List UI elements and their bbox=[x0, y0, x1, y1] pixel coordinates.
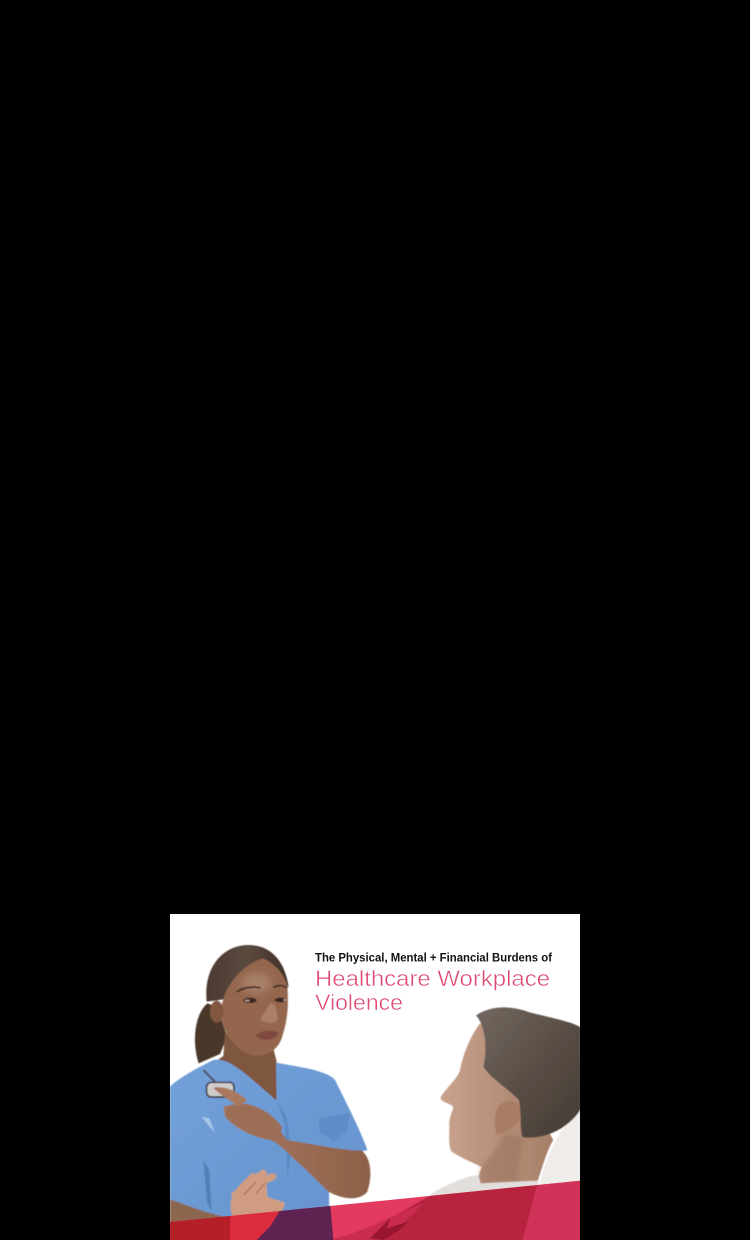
nurse ear bbox=[210, 1001, 223, 1023]
pointing finger bbox=[213, 1087, 247, 1107]
patient hair bbox=[476, 1007, 581, 1138]
pointing hand bbox=[226, 1102, 282, 1132]
title line 1: Healthcare Workplace bbox=[315, 966, 550, 991]
nurse figure bbox=[170, 945, 370, 1240]
nurse ponytail bbox=[195, 1003, 227, 1063]
nurse face bbox=[221, 958, 288, 1056]
band over gown bbox=[330, 1182, 538, 1240]
collar bbox=[430, 1175, 539, 1196]
red diagonal band bbox=[170, 1177, 581, 1240]
nurse eyes and brows bbox=[237, 986, 287, 1003]
face highlight bbox=[242, 973, 272, 993]
subtitle: The Physical, Mental + Financial Burdens of bbox=[315, 952, 552, 964]
nurse lips bbox=[255, 1031, 279, 1040]
raised hand bbox=[231, 1173, 285, 1227]
band on white bbox=[170, 1177, 581, 1240]
nurse hair bbox=[206, 945, 289, 1002]
patient ear bbox=[495, 1101, 522, 1134]
title bbox=[315, 966, 550, 1015]
gown dark fold bbox=[370, 1218, 408, 1240]
gown light fold bbox=[330, 1203, 423, 1240]
band over hand bbox=[230, 1211, 280, 1240]
band over left arm bbox=[170, 1215, 232, 1240]
panic badge bbox=[203, 1070, 234, 1097]
band over scrubs bbox=[256, 1206, 334, 1240]
patient head and neck bbox=[441, 1023, 553, 1186]
lower left arm bbox=[170, 1199, 226, 1222]
jaw shadow bbox=[478, 1133, 523, 1185]
patient figure bbox=[430, 1006, 580, 1196]
folded forearm bbox=[223, 1105, 370, 1198]
band over pillow bbox=[523, 1177, 581, 1240]
scrub top bbox=[170, 1060, 367, 1240]
photo illustration bbox=[170, 945, 581, 1240]
nurse neck bbox=[218, 1033, 278, 1101]
white panel bbox=[170, 914, 580, 1240]
title line 2: Violence bbox=[315, 990, 403, 1015]
nurse nose bbox=[261, 1003, 278, 1023]
scrub shadows and folds bbox=[202, 1101, 350, 1212]
infographic canvas bbox=[170, 914, 580, 1240]
pillow bbox=[523, 1108, 581, 1240]
